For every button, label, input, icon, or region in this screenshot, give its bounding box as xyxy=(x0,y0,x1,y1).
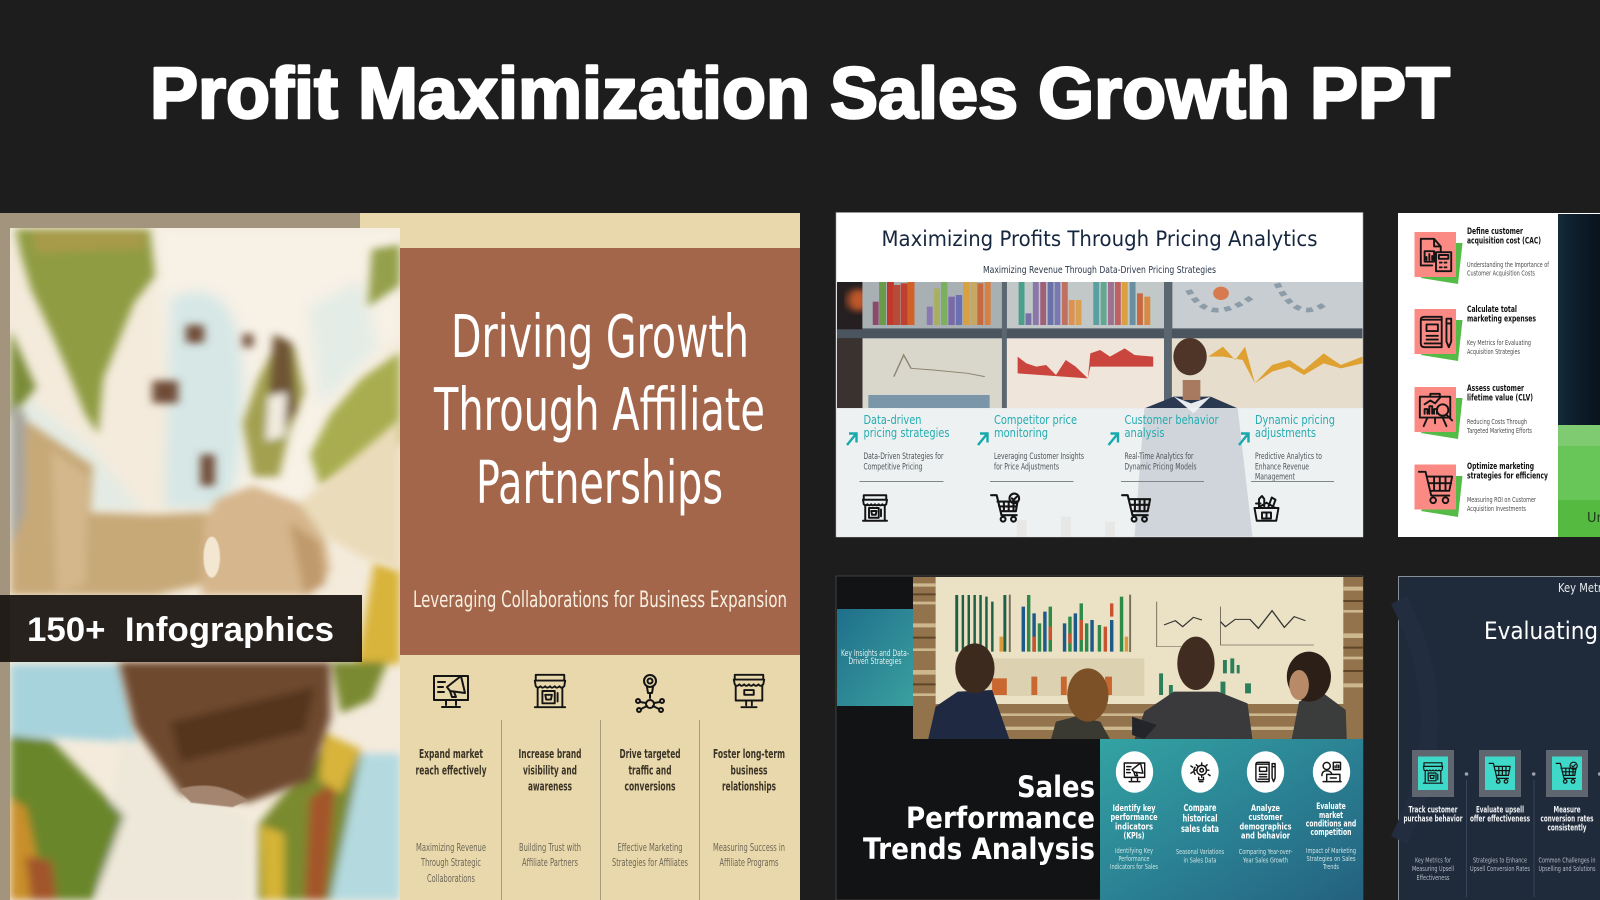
slide title: Trends Analysis xyxy=(863,832,1095,866)
indicator: customer demographics: Year Sales Growth xyxy=(1242,856,1288,864)
item: optimize strategies: Acquisition Investments xyxy=(1467,505,1526,513)
indicator: historical sales: Seasonal Variations xyxy=(1176,848,1224,856)
item: define CAC xyxy=(1414,227,1549,284)
column: data-driven pricing: Data-driven xyxy=(864,413,922,427)
item: define CAC: acquisition cost (CAC) xyxy=(1467,236,1541,246)
step: track purchases: Effectiveness xyxy=(1416,874,1450,882)
indicator: historical sales: sales data xyxy=(1181,824,1219,835)
indicator: historical sales: historical xyxy=(1182,814,1218,824)
column: competitor monitoring: for Price Adjustments xyxy=(994,462,1059,472)
indicator: market conditions xyxy=(1306,751,1356,871)
column 4 text: relationships xyxy=(722,780,776,794)
indicator: KPIs: Indicators for Sales xyxy=(1110,863,1158,871)
indicator: market conditions: Trends xyxy=(1322,863,1339,871)
indicator: KPIs: Performance xyxy=(1118,855,1150,863)
column 3 text xyxy=(612,747,688,869)
item: lifetime value: Reducing Costs Through xyxy=(1467,418,1527,426)
column: data-driven pricing xyxy=(847,413,950,521)
teal caption box: Key Insights and Data- xyxy=(841,649,909,659)
column 4 text: Affiliate Programs xyxy=(720,857,778,869)
brown title block: Leveraging Collaborations for Business Expansion xyxy=(413,588,787,613)
indicator: market conditions: conditions and xyxy=(1306,820,1356,830)
item: lifetime value: lifetime value (CLV) xyxy=(1467,394,1533,404)
column 2 text: visibility and xyxy=(523,764,577,778)
column: competitor monitoring xyxy=(978,413,1084,522)
column 2 text: Increase brand xyxy=(518,747,582,761)
step: conversion rates xyxy=(1538,750,1596,873)
column: customer behavior xyxy=(1108,413,1219,522)
step: track purchases xyxy=(1404,750,1463,882)
slide heading: Maximizing Revenue Through Data-Driven Pricing Strategies xyxy=(983,265,1216,276)
slide heading xyxy=(1484,581,1600,645)
panel: pricing analytics slide xyxy=(836,212,1363,537)
item: marketing expenses: Calculate total xyxy=(1467,305,1517,315)
slide title: Performance xyxy=(906,801,1095,835)
brown title block xyxy=(400,248,800,655)
column: customer behavior: Dynamic Pricing Models xyxy=(1124,462,1197,472)
icons row xyxy=(434,675,764,712)
brown title block: Through Affiliate xyxy=(433,375,765,444)
column: competitor monitoring: Leveraging Customer Insights xyxy=(994,452,1084,462)
indicator: KPIs: performance xyxy=(1110,813,1158,823)
column 1 text: Maximizing Revenue xyxy=(416,842,486,854)
slide heading xyxy=(882,227,1318,276)
analytics wall photo xyxy=(837,282,1362,537)
indicator: KPIs xyxy=(1110,751,1158,871)
column: data-driven pricing: Competitive Pricing xyxy=(864,462,922,472)
column: customer behavior: analysis xyxy=(1124,426,1164,440)
column: dynamic pricing: Dynamic pricing xyxy=(1255,413,1335,427)
item: lifetime value: Assess customer xyxy=(1467,384,1525,394)
item: lifetime value: Targeted Marketing Efforts xyxy=(1466,427,1532,435)
step: upsell offers: Evaluate upsell xyxy=(1476,806,1524,816)
team reviewing charts photo xyxy=(913,576,1363,739)
indicator: market conditions: Impact of Marketing xyxy=(1306,847,1356,855)
column: dynamic pricing xyxy=(1239,413,1335,521)
column: dynamic pricing: Predictive Analytics to xyxy=(1255,452,1322,462)
column 4 text: business xyxy=(730,764,768,778)
item: define CAC: Define customer xyxy=(1467,227,1524,237)
item: optimize strategies: strategies for efficiency xyxy=(1467,472,1548,482)
item: optimize strategies: Measuring ROI on Customer xyxy=(1467,496,1536,504)
step: conversion rates: Measure xyxy=(1554,806,1581,816)
column: customer behavior: Real-Time Analytics for xyxy=(1124,452,1194,462)
teal indicators block xyxy=(1100,739,1363,900)
translucent content band xyxy=(837,408,1363,537)
column 2 text: awareness xyxy=(528,780,572,794)
column 4 text: Foster long-term xyxy=(713,747,785,761)
indicator: market conditions: Strategies on Sales xyxy=(1306,855,1356,863)
indicator: market conditions: market xyxy=(1319,811,1343,821)
column: competitor monitoring: Competitor price xyxy=(994,413,1077,427)
column 2 text xyxy=(518,747,582,869)
column: dynamic pricing: Management xyxy=(1255,472,1295,482)
label: 150+ infographics: 150+ Infographics xyxy=(27,611,334,649)
indicator: historical sales: Compare xyxy=(1184,803,1216,814)
step: track purchases: purchase behavior xyxy=(1404,814,1463,824)
column 3 text: Strategies for Affiliates xyxy=(612,857,688,869)
slide heading: Maximizing Profits Through Pricing Analytics xyxy=(882,227,1318,252)
step: track purchases: Key Metrics for xyxy=(1415,856,1451,864)
panel: customer acquisition cost slide xyxy=(1398,213,1600,537)
column 1 text: Through Strategic xyxy=(420,857,481,869)
indicator: KPIs: (KPIs) xyxy=(1124,832,1144,842)
step: upsell offers: Strategies to Enhance xyxy=(1473,856,1527,864)
column 2 text: Affiliate Partners xyxy=(522,857,578,869)
teal caption box: Driven Strategies xyxy=(848,657,902,667)
item: define CAC: Understanding the Importance of xyxy=(1467,261,1549,269)
column: dynamic pricing: adjustments xyxy=(1255,426,1316,440)
dark photo xyxy=(1558,214,1600,425)
step: upsell offers xyxy=(1470,750,1530,873)
item: marketing expenses xyxy=(1414,305,1536,361)
handshake over world map photo xyxy=(10,227,400,900)
column 1 text xyxy=(416,747,487,885)
item: optimize strategies xyxy=(1414,462,1548,517)
indicator: customer demographics: Comparing Year-over- xyxy=(1239,848,1293,856)
column 3 text: traffic and xyxy=(628,764,672,778)
item: optimize strategies: Optimize marketing xyxy=(1467,462,1534,472)
panel: driving growth slide xyxy=(0,213,800,900)
column: data-driven pricing: pricing strategies xyxy=(864,426,950,440)
teal caption box xyxy=(837,609,913,706)
column: customer behavior: Customer behavior xyxy=(1124,413,1219,427)
step: track purchases: Track customer xyxy=(1408,806,1458,816)
slide title xyxy=(863,770,1095,866)
column 3 text: Drive targeted xyxy=(620,747,680,761)
column 4 text xyxy=(713,747,785,869)
column 1 text: Expand market xyxy=(419,747,483,761)
indicator: customer demographics: demographics xyxy=(1240,822,1292,832)
column: data-driven pricing: Data-Driven Strategies for xyxy=(864,452,944,462)
brown title block: Partnerships xyxy=(476,448,723,517)
column: competitor monitoring: monitoring xyxy=(994,426,1048,440)
title: Profit Maximization Sales Growth PPT xyxy=(150,54,1450,134)
column 1 text: reach effectively xyxy=(416,764,487,778)
column 1 text: Collaborations xyxy=(427,873,475,885)
panel: evaluating upsell slide xyxy=(1398,576,1600,900)
slide title: Sales xyxy=(1017,770,1095,804)
column 4 text: Measuring Success in xyxy=(713,842,785,854)
green band xyxy=(1558,425,1600,537)
step: track purchases: Measuring Upsell xyxy=(1412,865,1454,873)
item: marketing expenses: Acquisition Strategies xyxy=(1467,348,1520,356)
brown title block: Driving Growth xyxy=(451,302,749,371)
item: marketing expenses: marketing expenses xyxy=(1467,314,1536,324)
column 2 text: Building Trust with xyxy=(519,842,581,854)
item: lifetime value xyxy=(1414,384,1533,439)
indicator: customer demographics: Analyze xyxy=(1251,804,1280,814)
indicator: customer demographics xyxy=(1239,751,1293,864)
item: marketing expenses: Key Metrics for Evaluating xyxy=(1467,339,1531,347)
column 3 text: conversions xyxy=(624,780,676,794)
column 3 text: Effective Marketing xyxy=(618,842,682,854)
indicator: KPIs: Identifying Key xyxy=(1115,847,1153,855)
indicator: historical sales xyxy=(1176,751,1224,864)
indicator: market conditions: competition xyxy=(1310,828,1352,838)
column: dynamic pricing: Enhance Revenue xyxy=(1255,462,1309,472)
label: 150+ infographics xyxy=(0,595,362,662)
panel: sales performance slide xyxy=(836,576,1363,900)
step: upsell offers: Upsell Conversion Rates xyxy=(1470,865,1530,873)
item: define CAC: Customer Acquisition Costs xyxy=(1467,270,1535,278)
indicator: KPIs: Identify key xyxy=(1112,804,1156,814)
indicator: historical sales: in Sales Data xyxy=(1184,856,1216,864)
indicator: KPIs: indicators xyxy=(1115,822,1153,832)
indicator: customer demographics: customer xyxy=(1248,813,1283,823)
step: upsell offers: offer effectiveness xyxy=(1470,814,1530,824)
indicator: market conditions: Evaluate xyxy=(1316,802,1346,812)
indicator: customer demographics: and behavior xyxy=(1241,832,1290,842)
